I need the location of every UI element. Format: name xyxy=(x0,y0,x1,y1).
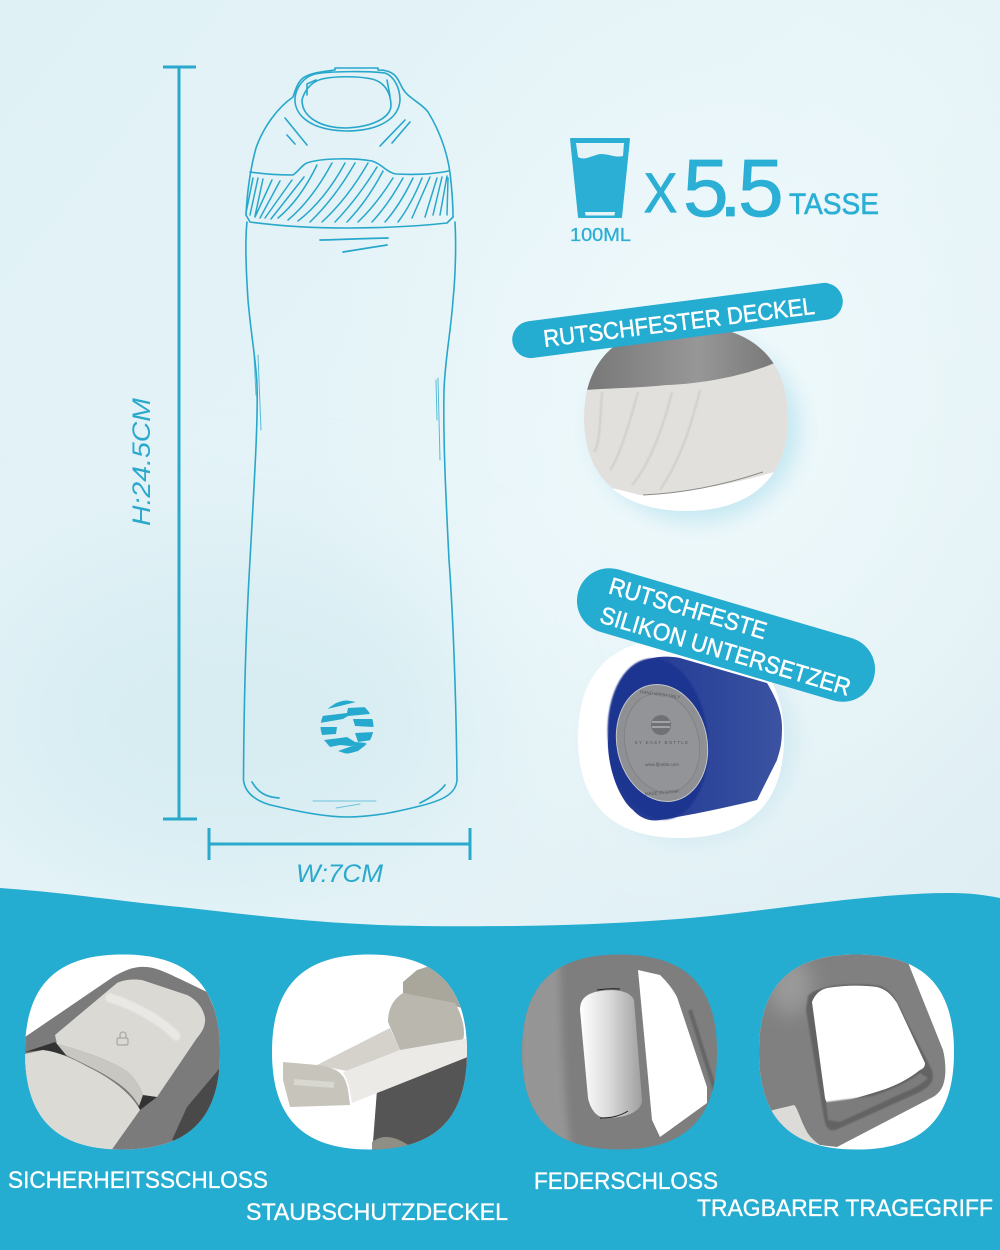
lid tread lines xyxy=(594,390,700,490)
lid end xyxy=(283,1062,350,1107)
bottle body outline xyxy=(244,222,457,817)
width dimension line xyxy=(209,828,470,860)
white opening xyxy=(638,970,707,1137)
carry handle opening xyxy=(302,77,391,128)
cup size label: 100ML xyxy=(570,225,631,245)
inner handle edge xyxy=(806,984,933,1130)
caption: safety lock: SICHERHEITSSCHLOSS xyxy=(8,1167,268,1194)
blue silicone sleeve xyxy=(608,657,782,821)
height dimension line xyxy=(163,67,197,819)
handle body xyxy=(754,950,945,1147)
lid grey top xyxy=(587,332,774,390)
bottle cap outline xyxy=(246,68,453,217)
lid arm top xyxy=(317,1028,400,1072)
dark body xyxy=(372,1054,467,1150)
spring button xyxy=(580,990,642,1118)
base label pill: RUTSCHFESTE xyxy=(606,573,770,645)
caption: carrying handle: TRAGBARER TRAGEGRIFF xyxy=(697,1195,993,1222)
width label: W:7CM xyxy=(296,860,383,888)
body sketch marks xyxy=(320,238,388,252)
silicone base rim xyxy=(600,653,716,825)
lid label pill: RUTSCHFESTER DECKEL xyxy=(542,293,816,353)
caption: dust cover: STAUBSCHUTZDECKEL xyxy=(246,1199,508,1226)
base engraving: HAND WASH ONLY xyxy=(640,689,681,700)
grip band hatching xyxy=(246,163,448,222)
empty cup top xyxy=(576,143,624,159)
base engraving xyxy=(635,689,689,796)
height label: H:24.5CM xyxy=(128,398,156,526)
lock glyph xyxy=(117,1032,128,1045)
lid arm front strip xyxy=(343,1038,470,1103)
white backdrop xyxy=(578,638,784,838)
base logo xyxy=(651,715,671,735)
bottle sketch xyxy=(244,68,457,817)
times sign: X xyxy=(644,161,677,224)
slider ridge xyxy=(110,998,176,1036)
photo: dust cover xyxy=(267,950,472,1155)
quantity 5.5: 5.5 xyxy=(683,143,784,234)
cup base highlight xyxy=(585,212,615,216)
slider underside xyxy=(57,1044,143,1106)
base photo glow xyxy=(588,642,796,842)
textured grip xyxy=(522,966,573,1142)
cup icon xyxy=(571,139,629,217)
photo: carrying handle xyxy=(754,950,959,1155)
lid body xyxy=(584,364,788,495)
photo: safety lock xyxy=(20,950,225,1155)
base photo xyxy=(578,638,784,838)
base label pill: SILIKON UNTERSETZER xyxy=(597,602,854,702)
cup unit label: TASSE xyxy=(789,188,879,221)
caption: spring lock: FEDERSCHLOSS xyxy=(534,1168,718,1195)
hinge top xyxy=(403,966,461,1008)
dark recess xyxy=(172,1068,220,1140)
base engraving: MADE IN CHINA xyxy=(645,789,679,796)
base engraving: www.fjbottle.com xyxy=(645,762,679,767)
photo: spring lock xyxy=(518,950,723,1155)
dark ridge xyxy=(690,1010,715,1090)
pale corner xyxy=(772,1105,820,1146)
grey frame xyxy=(25,967,225,1155)
handle opening xyxy=(812,986,925,1105)
base label pill xyxy=(569,560,883,710)
lid bottom edge xyxy=(643,472,763,495)
lock slider xyxy=(55,979,205,1097)
logo on bottle xyxy=(320,700,374,754)
lower handle shade xyxy=(826,1073,928,1122)
cap highlight strokes xyxy=(285,118,410,146)
grip band outline xyxy=(250,159,449,175)
base engraving: KY EAST BOTTLE xyxy=(635,740,689,745)
bottom wave panel xyxy=(0,888,1000,1250)
grey base disc xyxy=(606,676,718,810)
lid photo xyxy=(584,332,788,511)
front lid xyxy=(20,1050,140,1155)
lid photo glow xyxy=(592,334,800,522)
hinge block xyxy=(388,993,464,1055)
light patch xyxy=(768,955,812,1015)
